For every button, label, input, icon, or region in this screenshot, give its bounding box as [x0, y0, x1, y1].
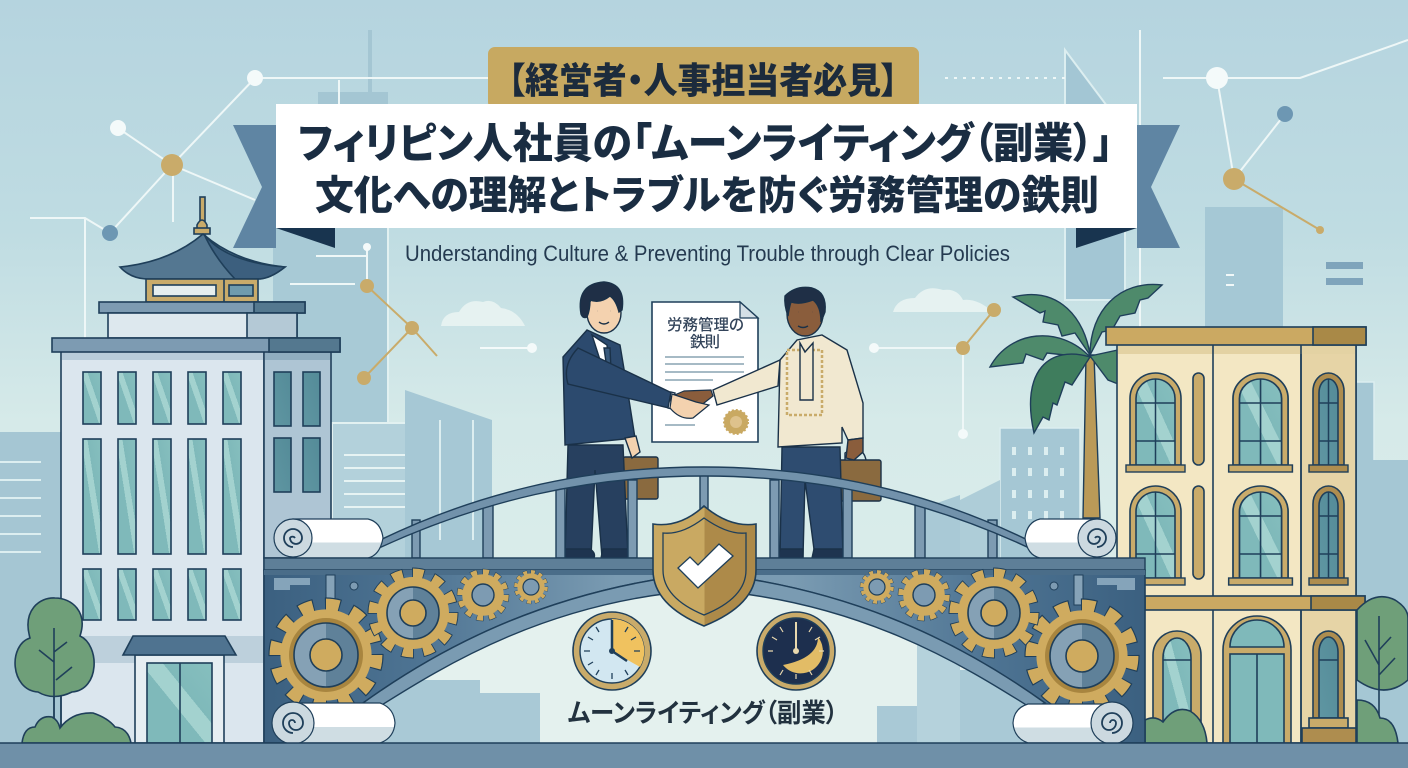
tag text: 【経営者・人事担当者必見】	[508, 60, 898, 101]
pilasters	[1193, 373, 1204, 465]
jacket	[563, 330, 635, 445]
left office building	[52, 197, 340, 743]
ground strip	[0, 743, 1408, 768]
sleeve	[566, 348, 672, 408]
title line 2: 文化への理解とトラブルを防ぐ労務管理の鉄則	[315, 173, 1099, 218]
arch opening background	[363, 573, 1045, 743]
check mark	[678, 544, 733, 588]
bridge girder panel	[264, 570, 1145, 743]
ground floor right window	[1313, 631, 1344, 718]
head	[787, 292, 823, 336]
night clock	[757, 612, 835, 690]
male manager in suit	[563, 282, 675, 558]
title panel	[276, 104, 1137, 228]
bridge deck beam	[264, 558, 1145, 575]
scroll top right	[1025, 519, 1116, 558]
lower bridge arch	[363, 573, 1045, 708]
scroll bottom right	[1013, 702, 1133, 744]
document	[652, 302, 758, 442]
left tree and bushes	[15, 598, 131, 743]
gold tag	[488, 47, 919, 109]
gear medium left	[375, 575, 451, 651]
shoes	[778, 549, 803, 558]
briefcase right	[845, 450, 866, 460]
building body	[61, 352, 264, 743]
day clock	[573, 612, 651, 690]
seal	[724, 410, 748, 434]
upper windows	[1126, 373, 1185, 472]
shirt	[778, 335, 863, 447]
banner ribbon right	[1076, 125, 1180, 248]
cuff	[668, 392, 675, 409]
document title: 労務管理の	[667, 316, 744, 334]
title line 1: フィリピン人社員の「ムーンライティング（副業）」	[298, 120, 1113, 167]
sleeve	[713, 360, 780, 405]
briefcase left	[623, 457, 658, 499]
english subtitle: Understanding Culture & Preventing Trouble through Clear Policies	[405, 241, 1010, 266]
moonlighting label: ムーンライティング（副業）	[568, 698, 838, 728]
upper bridge rail arch	[345, 467, 1062, 558]
Filipino employee in barong	[713, 287, 881, 558]
ground floor window	[1153, 631, 1201, 743]
clouds	[441, 288, 993, 326]
head	[587, 293, 621, 333]
hand on briefcase	[625, 436, 640, 458]
trousers	[780, 447, 843, 557]
right background palm	[990, 284, 1162, 518]
scroll top left	[274, 519, 383, 558]
upper cornice	[99, 302, 305, 313]
gear tiny left	[517, 573, 545, 601]
gear medium right	[956, 575, 1032, 651]
banner ribbon left	[233, 125, 335, 248]
gears right	[863, 573, 1130, 704]
hand	[846, 438, 863, 460]
trousers	[565, 445, 628, 557]
posts	[412, 475, 997, 558]
right heritage building	[1106, 327, 1366, 743]
right tree and bushes	[1145, 597, 1408, 743]
windows	[83, 372, 241, 620]
gears left	[278, 573, 545, 703]
gear large right	[1034, 608, 1130, 704]
gear small right	[902, 573, 946, 617]
network lines and nodes right	[869, 30, 1408, 439]
gear tiny right	[863, 573, 891, 601]
entrance	[123, 636, 236, 743]
main door	[1223, 616, 1291, 743]
panel posts	[274, 575, 1135, 605]
network lines and nodes left	[30, 70, 537, 385]
gear small left	[461, 573, 505, 617]
document: 鉄則	[690, 333, 720, 351]
shoes	[565, 549, 594, 558]
scroll bottom left	[272, 702, 395, 744]
gear large left	[278, 607, 374, 703]
shield with check	[653, 506, 756, 626]
handshake	[670, 390, 713, 418]
pagoda roof	[120, 197, 285, 302]
